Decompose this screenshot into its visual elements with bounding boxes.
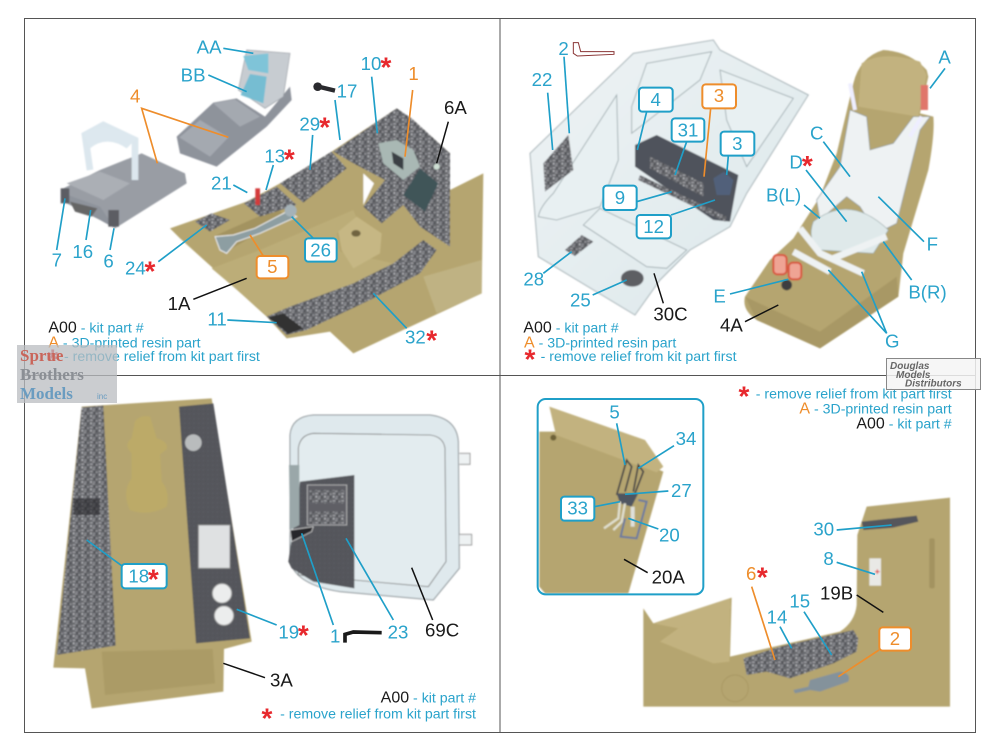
label: 6 (103, 228, 114, 272)
label: 29 star: * (319, 112, 330, 143)
label: BB (181, 65, 247, 92)
label: 3A: 3A (270, 669, 293, 690)
watermark: Sprue Brothers Models: Sprue (20, 346, 64, 365)
label: 5: 5 (609, 401, 620, 422)
callout: 31: 31 (678, 119, 698, 140)
label: 1A (168, 278, 247, 314)
label: F: F (927, 234, 938, 255)
label: E: E (713, 286, 726, 307)
resin seat with canopy frame, rear (177, 50, 292, 167)
legend (523, 320, 737, 374)
label: 23 (346, 538, 408, 642)
label: 27: 27 (671, 480, 692, 501)
label: C (810, 122, 850, 177)
label: 6A (437, 97, 467, 163)
callout: 18 star (87, 540, 167, 594)
callout: 2 resin (838, 627, 911, 677)
label: 6A: 6A (444, 97, 467, 118)
seat 4A with harness (744, 50, 934, 348)
legend: A00 - kit part # (381, 689, 476, 706)
label: 10 star: 10 (361, 53, 381, 74)
legend: A - 3D-printed resin part (48, 335, 201, 352)
label: 25 (570, 280, 627, 311)
label: 28: 28 (523, 269, 544, 290)
label: 30 (813, 519, 892, 540)
label: 6 star resin: * (757, 562, 768, 593)
label: B(R) (883, 242, 947, 302)
label: AA (197, 36, 253, 57)
legend: - remove relief from kit part first (756, 386, 952, 402)
label: 1: 1 (330, 625, 340, 646)
legend: - remove relief from kit part first (280, 706, 476, 722)
coaming model 3A (53, 398, 252, 708)
watermark: Douglas Models Distributors: Models (896, 370, 931, 381)
legend: A - 3D-printed resin part (799, 400, 952, 417)
label: 20A (624, 559, 685, 587)
legend: A00 - kit part # (856, 415, 952, 432)
label: 4A (720, 305, 778, 336)
label: 13 star: * (284, 143, 295, 174)
label: 16 (72, 210, 93, 262)
label: 27 (625, 480, 692, 501)
label: AA: AA (197, 36, 222, 57)
label: 4A: 4A (720, 315, 743, 336)
label: D star: * (802, 150, 813, 181)
label: BB: BB (181, 65, 206, 86)
label: 13 star: 13 (264, 145, 285, 166)
panel: instrument coaming and door (53, 398, 476, 734)
label: 19B: 19B (820, 583, 853, 604)
callout: 5 resin (250, 235, 288, 278)
legend: - remove relief from kit part first (64, 349, 260, 365)
callout: 3 resin: 3 (714, 85, 724, 106)
legend: * (47, 343, 58, 374)
callout: 4 (637, 88, 673, 150)
label: 1 (302, 533, 340, 646)
label: 17: 17 (337, 80, 357, 101)
watermark: Douglas Models Distributors: Douglas (890, 361, 930, 372)
watermark: Sprue Brothers Models: Models (20, 384, 73, 403)
callout: 33 (561, 497, 620, 521)
label: F (878, 197, 938, 255)
label: 19 star: * (298, 619, 309, 650)
label: 2 (558, 38, 569, 133)
icon: part 2 hook (573, 43, 614, 56)
label: 19B (820, 583, 883, 612)
label: 8 (823, 548, 875, 574)
label: 21: 21 (211, 172, 232, 193)
label: 6 star resin: 6 (746, 563, 756, 584)
label: 29 star (299, 112, 330, 170)
label: B(R): B(R) (908, 281, 947, 302)
label: 13 star (264, 143, 295, 190)
icon: part 17 knob (313, 82, 335, 91)
label: 30C: 30C (653, 304, 688, 325)
label: A: A (938, 46, 951, 67)
callout: 3: 3 (732, 133, 743, 154)
label: 7 (52, 198, 65, 271)
legend (739, 381, 952, 432)
label: 3A (223, 663, 293, 690)
label: 6 star resin (746, 562, 775, 660)
legend: - remove relief from kit part first (541, 349, 737, 365)
label: 20: 20 (659, 525, 680, 546)
clear part 30C (530, 40, 808, 315)
label: 6: 6 (103, 251, 114, 272)
legend: A00 - kit part # (48, 320, 144, 337)
label: 23: 23 (388, 621, 408, 642)
label: 34 (638, 428, 696, 468)
label: 14 (767, 606, 792, 648)
cockpit tub model (170, 108, 483, 353)
label: B(L): B(L) (766, 185, 801, 206)
label: G (828, 270, 900, 351)
label: 10 star (361, 52, 392, 133)
callout: 12 (637, 200, 715, 238)
legend (262, 689, 476, 734)
label: 24 star (125, 225, 207, 287)
legend: * (739, 381, 750, 412)
legend: * (262, 703, 273, 734)
label: 22: 22 (532, 69, 552, 90)
label: 25: 25 (570, 290, 591, 311)
callout: 2 resin: 2 (890, 628, 900, 649)
label: 22 (532, 69, 553, 150)
icon: bracket 1 (345, 632, 382, 643)
label: 15: 15 (789, 591, 810, 612)
wall model 19B (643, 498, 950, 707)
callout: 9: 9 (615, 187, 625, 208)
label: 1 resin: 1 (408, 63, 419, 84)
label: 4 resin (130, 86, 228, 163)
label: D star (789, 150, 847, 222)
callout: 26 (292, 217, 337, 262)
watermark: Douglas Models Distributors: Distributors (905, 378, 962, 390)
label: 32 star (373, 293, 437, 355)
label: 69C (412, 568, 459, 640)
watermark: Sprue Brothers Models (17, 345, 117, 403)
label: 24 star: * (145, 256, 156, 287)
callout: 18 star: * (148, 563, 159, 594)
label: E (713, 279, 788, 307)
callout: 3 resin (702, 84, 736, 177)
label: 28 (523, 252, 572, 290)
label: B(L) (766, 185, 820, 218)
callout: 9 (603, 186, 672, 210)
label: 4 resin: 4 (130, 86, 140, 107)
label: C: C (810, 122, 823, 143)
panel: right-hand cockpit wall (538, 381, 952, 707)
label: 32 star: * (426, 324, 437, 355)
label: 29 star: 29 (299, 114, 320, 135)
callout: 12: 12 (643, 216, 664, 237)
label: 8: 8 (823, 548, 834, 569)
label: 69C: 69C (425, 619, 459, 640)
resin seat, clear canopy (61, 125, 187, 228)
label: 20 (628, 518, 680, 546)
label: 10 star: * (381, 52, 392, 83)
legend: * (525, 343, 536, 374)
label: 30C (653, 273, 688, 325)
label: 30: 30 (813, 519, 834, 540)
label: 24 star: 24 (125, 258, 146, 279)
label: 2: 2 (558, 38, 569, 59)
callout: 33: 33 (567, 498, 588, 519)
label: 5 (609, 401, 625, 465)
watermark: Sprue Brothers Models: inc (97, 392, 107, 401)
label: 21 (211, 172, 247, 193)
panel: front cockpit tub (47, 36, 483, 374)
legend: A00 - kit part # (523, 320, 619, 337)
label: A (930, 46, 951, 88)
watermark: Douglas Models Distributors (886, 358, 980, 390)
panel: rear cockpit side console (523, 38, 951, 374)
label: 11 (207, 309, 277, 330)
label: 15 (789, 591, 832, 655)
callout: 3 (721, 132, 754, 175)
callout: 31 (672, 118, 704, 175)
label: 17 (335, 80, 357, 140)
label: 7: 7 (52, 250, 62, 271)
label: D star: D (789, 151, 803, 172)
label: 19 star: 19 (278, 621, 299, 642)
door clear part 69C (288, 415, 472, 600)
legend (47, 320, 260, 374)
legend: A - 3D-printed resin part (524, 335, 676, 352)
callout: 26: 26 (310, 240, 331, 261)
watermark: Sprue Brothers Models: Brothers (20, 365, 84, 384)
label: 34: 34 (676, 428, 696, 449)
callout: 4: 4 (650, 89, 661, 110)
label: 14: 14 (767, 606, 787, 627)
label: 16: 16 (72, 241, 93, 262)
label: G: G (885, 330, 900, 351)
label: 19 star (237, 609, 309, 650)
label: 1A: 1A (168, 293, 191, 314)
label: 11: 11 (207, 309, 227, 330)
callout: 18 star: 18 (128, 565, 149, 586)
label: 32 star: 32 (405, 326, 426, 347)
label: 1 resin (405, 63, 419, 157)
inset: detail view (538, 399, 703, 594)
callout: 5 resin: 5 (267, 256, 278, 277)
label: 20A: 20A (652, 566, 685, 587)
